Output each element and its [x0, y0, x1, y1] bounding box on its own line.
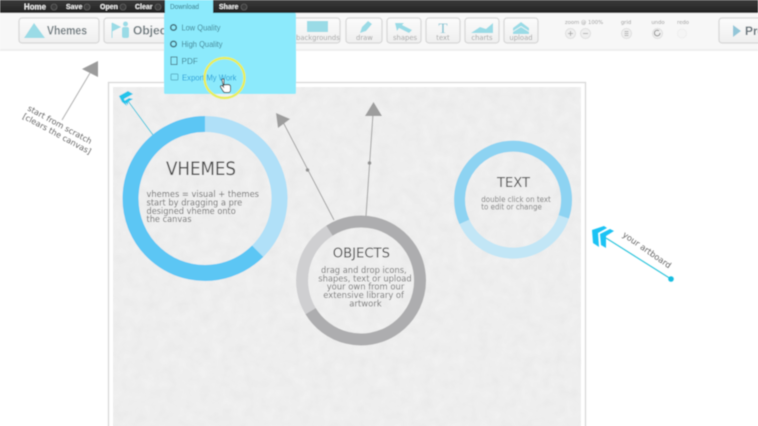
button: vhemes: Vhemes [47, 24, 87, 38]
button: draw [346, 18, 382, 43]
button: shapes [387, 18, 421, 43]
label: start from scratch: start from scratch [26, 104, 93, 146]
menu item: high quality: High Quality [182, 40, 223, 49]
icon: hand cursor [220, 79, 230, 92]
button: backgrounds: backgrounds [296, 34, 340, 42]
text block: text [481, 195, 551, 212]
menu item: pdf: PDF [182, 57, 198, 66]
icon: artboard corner chevrons [119, 91, 153, 135]
arrow: objects left [276, 113, 334, 220]
ring chart: objects [302, 221, 420, 339]
text block: vhemes: start by dragging a pre [146, 198, 243, 208]
text block: vhemes: designed vheme onto [146, 207, 236, 217]
download dropdown menu [164, 0, 296, 94]
top menu bar: Home [24, 2, 46, 12]
zoom, grid, undo and redo controls [565, 20, 689, 38]
heading: vhemes: VHEMES [166, 159, 236, 180]
text block: vhemes: vhemes = visual + themes [146, 190, 259, 200]
button: charts: charts [471, 34, 493, 42]
menu item: low quality: Low Quality [182, 24, 221, 32]
ring chart: text [460, 146, 567, 253]
button: preview [719, 18, 758, 43]
zoom, grid, undo and redo controls: redo [677, 20, 689, 26]
download dropdown menu: Download [170, 2, 199, 11]
top menu bar: Save [66, 4, 82, 11]
button: charts [465, 18, 499, 43]
artboard [108, 82, 586, 426]
text block: objects: shapes, text or upload [318, 274, 412, 284]
arrow: your artboard [592, 226, 674, 282]
heading: objects: OBJECTS [333, 245, 390, 261]
button: vhemes [19, 18, 99, 43]
ring chart: vhemes [131, 124, 280, 273]
arrow: start from scratch [62, 61, 98, 120]
zoom, grid, undo and redo controls: zoom @ 100% [565, 20, 603, 26]
label: your artboard: your artboard [621, 229, 673, 270]
text block: text: double click on text [481, 195, 551, 204]
button: draw: draw [356, 34, 373, 42]
button: objects: Objects [133, 24, 177, 38]
button: text: T [438, 21, 448, 37]
zoom, grid, undo and redo controls: grid [621, 20, 631, 26]
toolbar [0, 13, 758, 51]
text block: objects: extensive library of [323, 291, 405, 301]
cursor highlight ring [204, 58, 244, 98]
button: text [426, 18, 460, 43]
arrow: objects up [365, 102, 382, 216]
text block: objects: artwork [349, 299, 383, 309]
top menu bar [0, 0, 758, 13]
button: shapes: shapes [393, 34, 418, 42]
button: upload: upload [509, 34, 533, 42]
zoom, grid, undo and redo controls: undo [651, 20, 665, 26]
button: upload [504, 18, 538, 43]
text block: vhemes [146, 190, 259, 225]
top menu bar: Open [100, 4, 118, 11]
top menu bar: Clear [135, 4, 153, 11]
label: start from scratch: [clears the canvas] [21, 112, 93, 156]
text block: objects [318, 266, 412, 309]
button: text: text [436, 34, 450, 42]
text block: text: to edit or change [481, 202, 542, 212]
text block: vhemes: the canvas [146, 215, 192, 225]
text block: objects: drag and drop icons, [321, 266, 407, 276]
menu item: export my work: Export My Work [182, 73, 237, 82]
button: objects [104, 18, 177, 43]
heading: text: TEXT [496, 175, 531, 191]
button: backgrounds [290, 18, 340, 43]
text block: objects: your own from our [327, 283, 405, 293]
top menu bar: Share [219, 4, 239, 11]
